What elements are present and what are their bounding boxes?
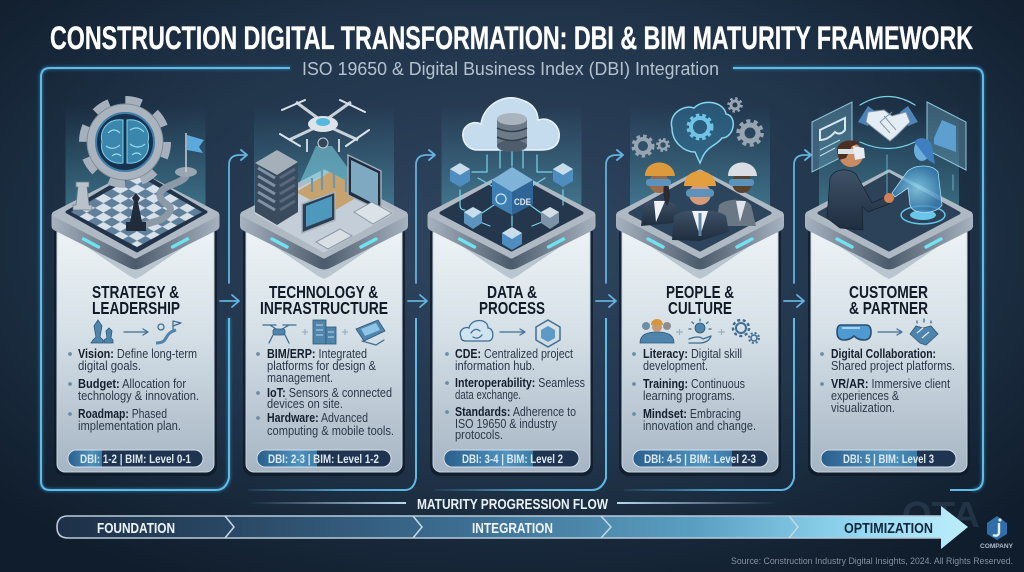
icon row: cloud, arrow, connected cube xyxy=(460,320,560,347)
bullet list: data exchange. xyxy=(455,387,521,402)
icon row: drone, building, computer xyxy=(263,320,385,345)
heading: INFRASTRUCTURE xyxy=(260,298,388,318)
flow heading: MATURITY PROGRESSION FLOW xyxy=(417,496,609,513)
illustration: VR handshake with hologram client xyxy=(812,96,966,250)
company logo xyxy=(980,516,1013,550)
illustration: drone, server, monitors and site model xyxy=(255,100,392,251)
bullet list: Training: Continuous xyxy=(643,376,745,391)
heading: LEADERSHIP xyxy=(92,298,180,318)
watermark: OTA xyxy=(902,494,980,535)
outer frame and connectors xyxy=(41,68,983,490)
bullet list: Digital Collaboration: xyxy=(831,346,936,361)
maturity progression arrow xyxy=(57,506,968,549)
bullet list: technology & innovation. xyxy=(78,388,199,403)
bullet list: Mindset: Embracing xyxy=(643,406,741,421)
heading: STRATEGY & xyxy=(92,282,179,302)
heading xyxy=(849,282,928,318)
arrow: people to customer xyxy=(784,150,811,307)
illustration: chessboard, gear brain and roadmap flag xyxy=(67,101,206,251)
maturity pill xyxy=(444,450,579,467)
bullet list: Literacy: Digital skill xyxy=(643,346,742,361)
heading xyxy=(260,282,388,318)
stage labels xyxy=(97,521,933,537)
heading xyxy=(479,282,545,318)
heading: PROCESS xyxy=(479,298,545,318)
bullet list: computing & mobile tools. xyxy=(267,423,394,438)
heading: CULTURE xyxy=(668,298,732,318)
bullet list: protocols. xyxy=(455,427,503,442)
bullet list: learning programs. xyxy=(643,388,735,403)
maturity pill: DBI: 3-4 | BIM: Level 2 xyxy=(462,452,563,466)
bullet list xyxy=(820,346,955,415)
bullet list: CDE: Centralized project xyxy=(455,346,573,361)
bullet list: implementation plan. xyxy=(78,418,181,433)
bullet list: Roadmap: Phased xyxy=(78,406,167,421)
stage labels: INTEGRATION xyxy=(472,521,553,537)
panel: technology and infrastructure xyxy=(240,100,408,476)
maturity pill: DBI: 1-2 | BIM: Level 0-1 xyxy=(80,452,191,466)
heading xyxy=(92,282,180,318)
arrow: technology to data xyxy=(408,150,435,307)
stage labels: OPTIMIZATION xyxy=(844,521,933,537)
heading xyxy=(666,282,734,318)
arrow: data to people xyxy=(596,150,623,307)
panel: people and culture xyxy=(616,98,784,476)
bullet list: experiences & xyxy=(831,388,899,403)
heading: DATA & xyxy=(487,282,537,302)
bullet list: management. xyxy=(267,370,333,385)
panel: data and process xyxy=(428,98,596,476)
illustration: team in helmets with idea cloud and gears xyxy=(630,98,770,250)
bullet list: digital goals. xyxy=(78,358,141,373)
heading: CUSTOMER xyxy=(849,282,928,302)
heading: & PARTNER xyxy=(849,298,928,318)
bullet list: visualization. xyxy=(831,400,895,415)
bullet list: Standards: Adherence to xyxy=(455,404,576,419)
bullet list xyxy=(632,346,756,433)
maturity pill xyxy=(68,450,203,467)
bullet list: development. xyxy=(643,358,708,373)
icon row: goggles, arrow, handshake xyxy=(837,319,938,345)
panel: customer and partner xyxy=(805,96,973,476)
bullet list: Hardware: Advanced xyxy=(267,410,368,425)
heading: TECHNOLOGY & xyxy=(269,282,378,302)
maturity pill: DBI: 4-5 | BIM: Level 2-3 xyxy=(644,452,756,466)
bullet list: innovation and change. xyxy=(643,418,756,433)
stage labels: FOUNDATION xyxy=(97,521,175,537)
subtitle: ISO 19650 & Digital Business Index (DBI) Integration xyxy=(302,59,719,79)
bullet list xyxy=(256,346,394,438)
icon row: chess, arrow, route xyxy=(91,320,181,343)
bullet list: Vision: Define long-term xyxy=(78,346,197,361)
bullet list xyxy=(445,346,585,442)
maturity pill: DBI: 5 | BIM: Level 3 xyxy=(843,452,934,466)
bullet list: Shared project platforms. xyxy=(831,358,955,373)
bullet list xyxy=(68,346,199,433)
bullet list: IoT: Sensors & connected xyxy=(267,385,392,400)
bullet list: Budget: Allocation for xyxy=(78,376,187,391)
maturity pill xyxy=(257,450,391,467)
maturity pill xyxy=(821,450,956,467)
heading: PEOPLE & xyxy=(666,282,734,302)
bullet list: platforms for design & xyxy=(267,358,376,373)
illustration: cloud database and CDE hub: CDE xyxy=(514,197,531,207)
illustration: cloud database and CDE hub xyxy=(441,98,582,250)
bullet list: devices on site. xyxy=(267,396,343,411)
arrow: strategy to technology xyxy=(220,150,247,307)
bullet list: ISO 19650 & industry xyxy=(455,416,557,431)
company logo: COMPANY xyxy=(980,544,1013,550)
icon row: team, idea hand, gears xyxy=(640,319,759,343)
bullet list: VR/AR: Immersive client xyxy=(831,376,950,391)
bullet list: information hub. xyxy=(455,358,535,373)
panel: strategy and leadership xyxy=(52,101,220,476)
bullet list: BIM/ERP: Integrated xyxy=(267,346,367,361)
maturity pill: DBI: 2-3 | BIM: Level 1-2 xyxy=(268,452,379,466)
bullet list: Interoperability: Seamless xyxy=(455,375,585,390)
